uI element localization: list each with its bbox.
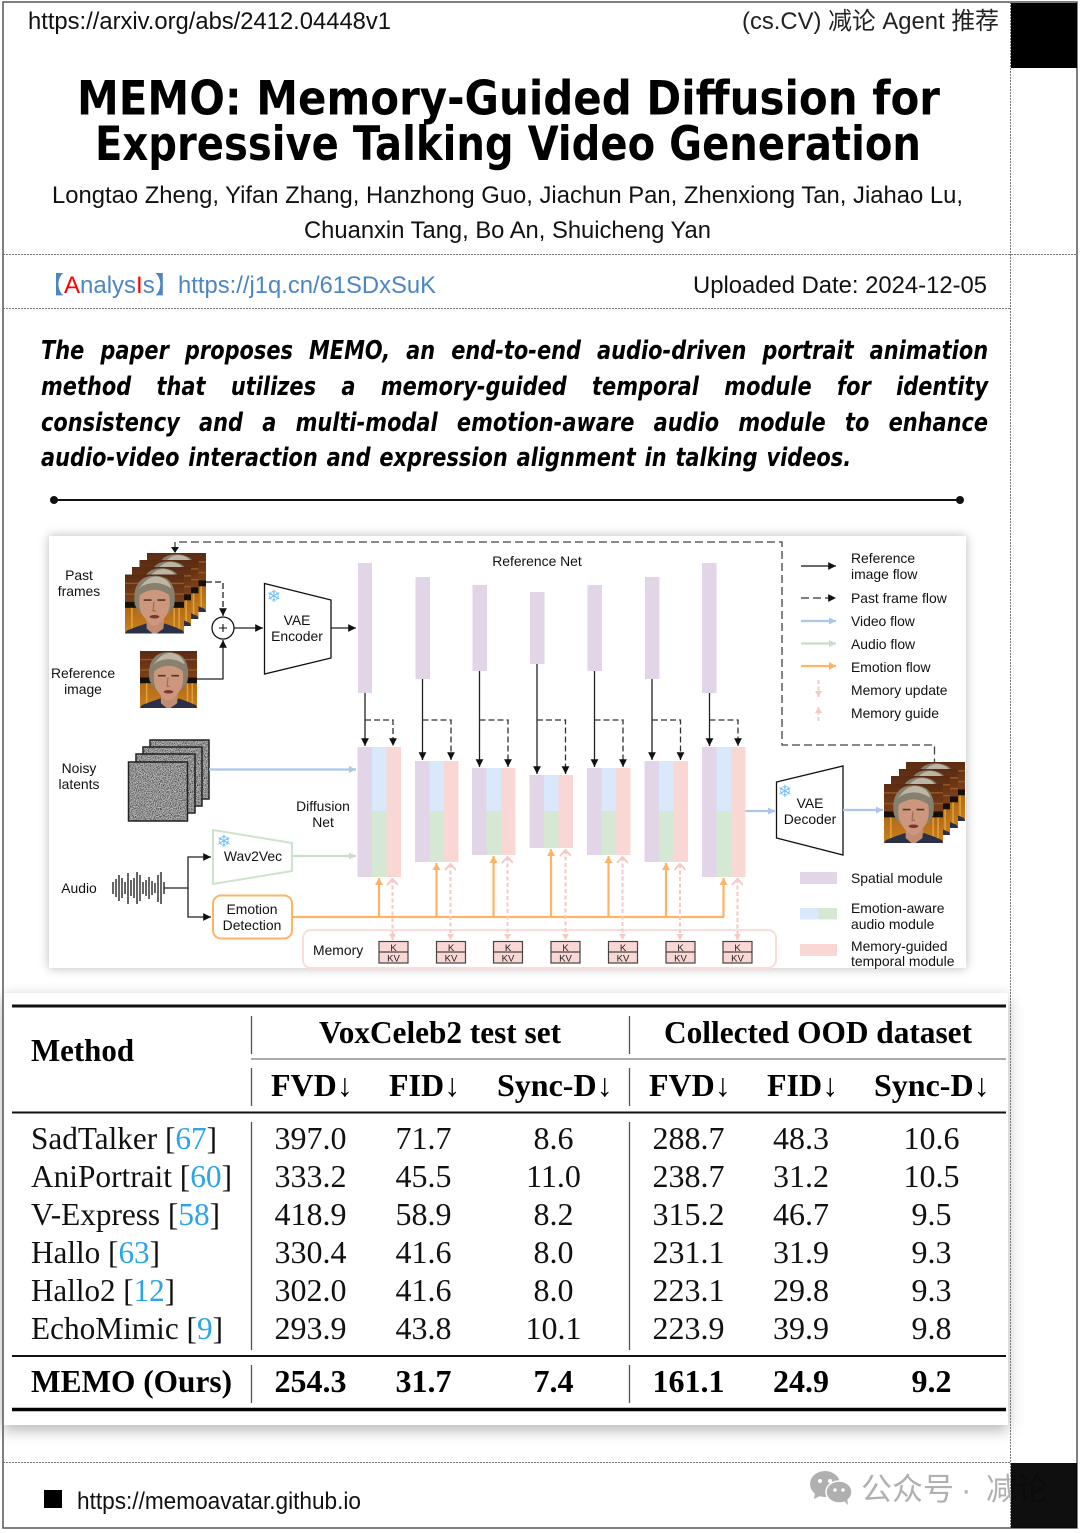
past frames dashed feedback loop bbox=[175, 542, 934, 762]
legend: modules: Emotion-aware bbox=[851, 900, 945, 916]
legend: flows: Memory guide bbox=[851, 705, 939, 721]
table header: VoxCeleb2 test set bbox=[319, 1014, 561, 1050]
input labels: image bbox=[64, 681, 102, 697]
reference image flow arrows bbox=[365, 664, 710, 774]
input labels: Reference bbox=[51, 665, 115, 681]
table header: FID↓ bbox=[389, 1067, 460, 1103]
MEMO row: MEMO (Ours) bbox=[31, 1363, 232, 1399]
OOD values bbox=[652, 1120, 960, 1346]
arrow: to VAE decoder bbox=[746, 810, 775, 812]
VAE Encoder: Encoder bbox=[271, 628, 323, 644]
diagram panel background bbox=[49, 536, 966, 968]
arrow: audio flow bbox=[292, 855, 356, 857]
VoxCeleb2 values: 8.0 bbox=[534, 1272, 574, 1308]
table header: FVD↓ bbox=[649, 1067, 731, 1103]
memory bank: KV bbox=[445, 954, 458, 964]
divider with end dots bbox=[50, 496, 964, 504]
legend: flows: Emotion flow bbox=[851, 659, 931, 675]
input labels: Net bbox=[312, 814, 334, 830]
legend: modules bbox=[800, 870, 955, 969]
summary paragraph bbox=[41, 336, 989, 473]
table header: Sync-D↓ bbox=[874, 1067, 990, 1103]
summary paragraph: consistency and a multi-modal emotion-aware audio module to enhance bbox=[41, 408, 988, 438]
memory bank: K bbox=[562, 943, 569, 954]
OOD values: 9.3 bbox=[912, 1234, 952, 1270]
table rules bbox=[12, 1006, 1006, 1410]
VoxCeleb2 values: 41.6 bbox=[396, 1234, 452, 1270]
memory update and guide arrows bbox=[392, 850, 738, 940]
upload date: Uploaded Date: 2024-12-05 bbox=[693, 272, 987, 299]
icon: wechat bubbles bbox=[810, 1471, 852, 1505]
diffusion net blocks bbox=[358, 747, 746, 877]
memory bank: KV bbox=[731, 954, 744, 964]
VoxCeleb2 values: 45.5 bbox=[396, 1158, 452, 1194]
memory bank: K bbox=[734, 943, 741, 954]
VAE Encoder: VAE bbox=[284, 612, 310, 628]
method names: Hallo2 [12] bbox=[31, 1272, 175, 1308]
input labels: latents bbox=[59, 776, 100, 792]
VoxCeleb2 values: 8.2 bbox=[534, 1196, 574, 1232]
VoxCeleb2 values: 10.1 bbox=[526, 1310, 582, 1346]
VoxCeleb2 values bbox=[274, 1120, 582, 1346]
arrow: video flow input bbox=[209, 768, 356, 771]
input labels: Past bbox=[65, 567, 93, 583]
table header: Method bbox=[31, 1032, 134, 1068]
OOD values: 288.7 bbox=[652, 1120, 724, 1156]
summary paragraph: method that utilizes a memory-guided temporal module for identity bbox=[41, 372, 988, 402]
Wav2Vec: ❄ bbox=[217, 832, 231, 852]
combine connectors bbox=[197, 582, 356, 679]
memory bank: K bbox=[448, 943, 455, 954]
VAE Decoder: Decoder bbox=[784, 811, 837, 827]
label: Reference Net: Reference Net bbox=[492, 553, 582, 569]
OOD values: 223.9 bbox=[652, 1310, 724, 1346]
OOD values: 9.3 bbox=[912, 1272, 952, 1308]
VoxCeleb2 values: 330.4 bbox=[274, 1234, 346, 1270]
method names bbox=[31, 1120, 232, 1346]
analysis link: https://j1q.cn/61SDxSuK bbox=[178, 272, 436, 299]
OOD values: 315.2 bbox=[652, 1196, 724, 1232]
input labels: Noisy bbox=[62, 760, 96, 776]
watermark text bbox=[861, 1472, 1048, 1507]
image: noisy latents stack bbox=[128, 740, 209, 821]
OOD values: 231.1 bbox=[652, 1234, 724, 1270]
legend: flows: Video flow bbox=[851, 613, 916, 629]
VoxCeleb2 values: 293.9 bbox=[274, 1310, 346, 1346]
memory bank: K bbox=[505, 943, 512, 954]
method names: AniPortrait [60] bbox=[31, 1158, 232, 1194]
VAE Encoder: ❄ bbox=[267, 587, 281, 607]
watermark text: · bbox=[961, 1472, 971, 1507]
Emotion Detection bbox=[213, 896, 292, 938]
MEMO row: 7.4 bbox=[534, 1363, 574, 1399]
table header: Sync-D↓ bbox=[497, 1067, 613, 1103]
legend: flows: Memory update bbox=[851, 682, 948, 698]
legend: flows: Audio flow bbox=[851, 636, 916, 652]
watermark text: 减论 bbox=[986, 1472, 1048, 1507]
emotion flow lines bbox=[292, 849, 724, 917]
VoxCeleb2 values: 8.6 bbox=[534, 1120, 574, 1156]
method names: EchoMimic [9] bbox=[31, 1310, 223, 1346]
project link: https://memoavatar.github.io bbox=[77, 1488, 361, 1515]
input labels: Audio bbox=[61, 880, 97, 896]
table header: FVD↓ bbox=[271, 1067, 353, 1103]
method names: SadTalker [67] bbox=[31, 1120, 217, 1156]
VoxCeleb2 values: 41.6 bbox=[396, 1272, 452, 1308]
authors: Longtao Zheng, Yifan Zhang, Hanzhong Guo, Jiachun Pan, Zhenxiong Tan, Jiahao Lu, bbox=[52, 182, 963, 209]
title bbox=[77, 72, 941, 172]
title: Expressive Talking Video Generation bbox=[95, 117, 921, 172]
OOD values: 31.2 bbox=[773, 1158, 829, 1194]
MEMO row: 31.7 bbox=[396, 1363, 452, 1399]
footer bullet bbox=[44, 1490, 62, 1508]
image: past frames stack bbox=[125, 553, 206, 634]
legend: flows: Reference bbox=[851, 550, 915, 566]
VAE Decoder: VAE bbox=[797, 795, 823, 811]
footer bbox=[44, 1463, 1077, 1528]
black corner block top right bbox=[1011, 3, 1077, 68]
OOD values: 9.5 bbox=[912, 1196, 952, 1232]
VoxCeleb2 values: 8.0 bbox=[534, 1234, 574, 1270]
watermark text: 公众号 bbox=[861, 1472, 954, 1507]
image: output frames stack bbox=[884, 762, 965, 843]
VoxCeleb2 values: 71.7 bbox=[396, 1120, 452, 1156]
OOD values: 29.8 bbox=[773, 1272, 829, 1308]
past frame flow arrows bbox=[365, 720, 738, 774]
icon: audio waveform bbox=[113, 872, 164, 904]
VoxCeleb2 values: 418.9 bbox=[274, 1196, 346, 1232]
legend: modules: temporal module bbox=[851, 953, 955, 969]
analysis link bbox=[40, 272, 436, 299]
input labels bbox=[51, 567, 350, 896]
OOD values: 46.7 bbox=[773, 1196, 829, 1232]
VoxCeleb2 values: 58.9 bbox=[396, 1196, 452, 1232]
memory bank: K bbox=[620, 943, 627, 954]
summary paragraph: audio-video interaction and expression alignment in talking videos. bbox=[41, 443, 851, 473]
VoxCeleb2 values: 302.0 bbox=[274, 1272, 346, 1308]
OOD values: 10.6 bbox=[904, 1120, 960, 1156]
table header: Collected OOD dataset bbox=[664, 1014, 972, 1050]
memory bank: K bbox=[677, 943, 684, 954]
Emotion Detection: Emotion bbox=[227, 901, 277, 917]
input labels: Diffusion bbox=[296, 798, 350, 814]
memory bank: KV bbox=[387, 954, 400, 964]
analysis link: 【AnalysIs】 bbox=[40, 272, 179, 299]
memory bank: KV bbox=[674, 954, 687, 964]
title: MEMO: Memory-Guided Diffusion for bbox=[77, 72, 941, 126]
Emotion Detection: Detection bbox=[223, 917, 281, 933]
OOD values: 39.9 bbox=[773, 1310, 829, 1346]
legend: modules: Memory-guided bbox=[851, 938, 948, 954]
legend: flows: Past frame flow bbox=[851, 590, 948, 606]
OOD values: 9.8 bbox=[912, 1310, 952, 1346]
VoxCeleb2 values: 397.0 bbox=[274, 1120, 346, 1156]
authors: Chuanxin Tang, Bo An, Shuicheng Yan bbox=[304, 217, 711, 244]
MEMO row: 24.9 bbox=[773, 1363, 829, 1399]
memory bank: K bbox=[390, 943, 397, 954]
legend: flows bbox=[801, 550, 948, 721]
method names: Hallo [63] bbox=[31, 1234, 160, 1270]
results table bbox=[12, 1004, 1006, 1412]
memory bank bbox=[303, 930, 776, 968]
VoxCeleb2 values: 11.0 bbox=[526, 1158, 581, 1194]
MEMO row: 254.3 bbox=[274, 1363, 346, 1399]
memory bank: KV bbox=[502, 954, 515, 964]
legend: modules: Spatial module bbox=[851, 870, 943, 886]
Wav2Vec: Wav2Vec bbox=[224, 848, 282, 864]
MEMO row bbox=[31, 1363, 952, 1399]
VAE Encoder bbox=[264, 584, 331, 674]
category tag: (cs.CV) 减论 Agent 推荐 bbox=[742, 8, 999, 35]
MEMO row: 9.2 bbox=[912, 1363, 952, 1399]
VoxCeleb2 values: 43.8 bbox=[396, 1310, 452, 1346]
table panel background bbox=[3, 993, 1008, 1425]
table header: FID↓ bbox=[767, 1067, 838, 1103]
VAE Decoder: ❄ bbox=[778, 782, 792, 802]
OOD values: 10.5 bbox=[904, 1158, 960, 1194]
Wav2Vec bbox=[213, 830, 292, 884]
arXiv link: https://arxiv.org/abs/2412.04448v1 bbox=[28, 8, 391, 35]
OOD values: 48.3 bbox=[773, 1120, 829, 1156]
icon: plus node bbox=[212, 617, 234, 639]
reference net columns bbox=[358, 563, 716, 693]
black corner block bottom right bbox=[1011, 1463, 1077, 1528]
header and title block bbox=[28, 8, 999, 299]
audio connectors bbox=[164, 857, 211, 917]
legend: modules: audio module bbox=[851, 916, 935, 932]
OOD values: 31.9 bbox=[773, 1234, 829, 1270]
VoxCeleb2 values: 333.2 bbox=[274, 1158, 346, 1194]
memory bank: KV bbox=[559, 954, 572, 964]
memory bank: Memory bbox=[313, 942, 363, 958]
image: reference image bbox=[140, 651, 197, 708]
MEMO row: 161.1 bbox=[652, 1363, 724, 1399]
VAE Decoder bbox=[776, 766, 843, 855]
summary paragraph: The paper proposes MEMO, an end-to-end audio-driven portrait animation bbox=[41, 336, 988, 366]
OOD values: 238.7 bbox=[652, 1158, 724, 1194]
OOD values: 223.1 bbox=[652, 1272, 724, 1308]
architecture diagram bbox=[51, 541, 965, 969]
method names: V-Express [58] bbox=[31, 1196, 220, 1232]
input labels: frames bbox=[58, 583, 100, 599]
authors bbox=[52, 182, 963, 244]
legend: flows: image flow bbox=[851, 566, 918, 582]
memory bank: KV bbox=[617, 954, 630, 964]
arrow: to output frames bbox=[843, 809, 883, 811]
table header bbox=[31, 1014, 990, 1103]
